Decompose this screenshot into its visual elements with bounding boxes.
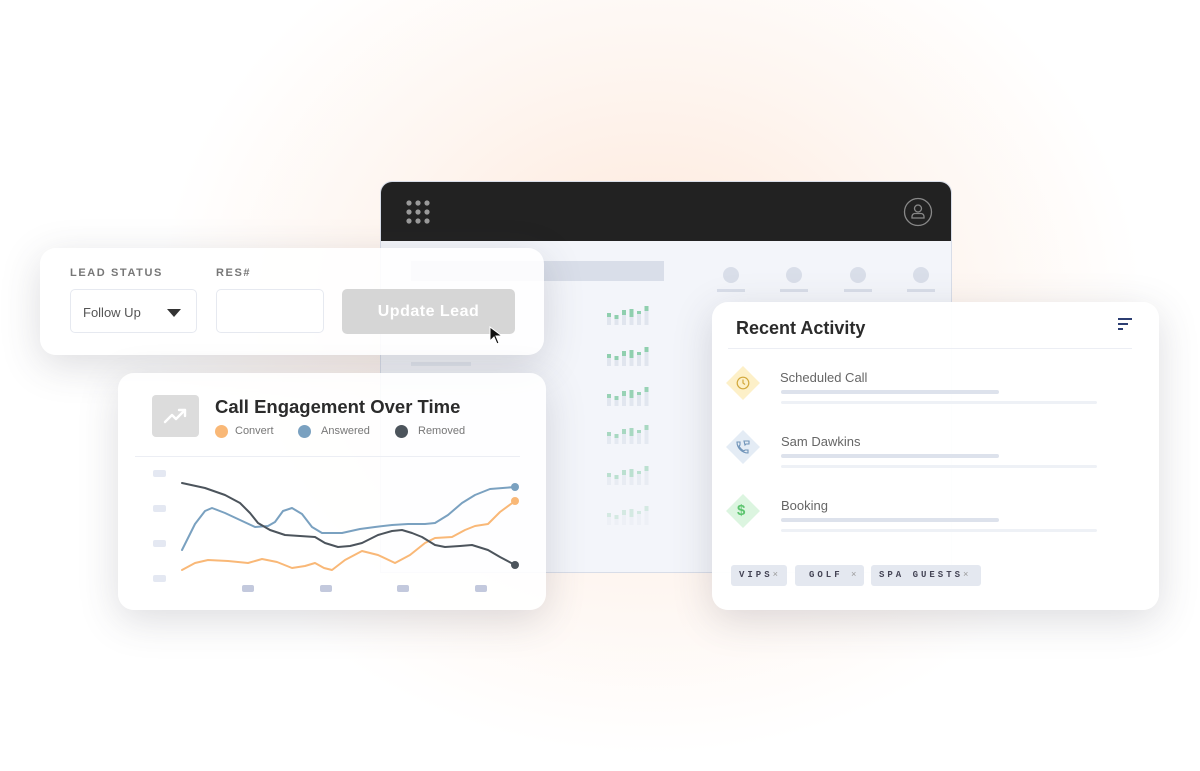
status circles bbox=[717, 267, 935, 292]
tag: spa guests: SPA GUESTS× bbox=[879, 570, 968, 580]
heading: Call Engagement Over Time bbox=[215, 396, 460, 417]
icon: cursor bbox=[490, 326, 500, 344]
panel: recent activity bbox=[712, 302, 1159, 610]
tag: golf: GOLF × bbox=[809, 570, 856, 580]
item: booking: Booking bbox=[781, 498, 828, 513]
tag: spa guests bbox=[871, 565, 981, 586]
tag: vips bbox=[731, 565, 787, 586]
icon: filter bbox=[1118, 318, 1132, 330]
label: lead status: LEAD STATUS bbox=[70, 267, 163, 279]
mini bar charts bbox=[607, 306, 648, 519]
tag: vips: VIPS× bbox=[739, 570, 778, 580]
dropdown bbox=[70, 289, 197, 333]
input box bbox=[216, 289, 324, 333]
item: scheduled call bbox=[726, 366, 1097, 404]
legend bbox=[215, 425, 465, 438]
item: sam dawkins: Sam Dawkins bbox=[781, 434, 860, 449]
legend: Convert bbox=[235, 425, 274, 437]
icon: user avatar bbox=[904, 198, 932, 226]
panel: dashboard window bbox=[380, 181, 952, 573]
panel: lead status form bbox=[40, 248, 544, 355]
item: scheduled call: Scheduled Call bbox=[780, 370, 867, 385]
button: update lead bbox=[342, 289, 515, 334]
legend: Removed bbox=[418, 425, 465, 437]
icon: grid dots bbox=[406, 200, 430, 224]
label: res#: RES# bbox=[216, 267, 251, 279]
line chart bbox=[153, 470, 519, 592]
panel: call engagement chart bbox=[118, 373, 546, 610]
item: sam dawkins bbox=[726, 430, 1097, 468]
button: update lead: Update Lead bbox=[378, 303, 479, 320]
item: booking: $ bbox=[737, 502, 745, 519]
legend: Answered bbox=[321, 425, 370, 437]
heading: Recent Activity bbox=[736, 318, 865, 338]
faint list lines bbox=[411, 362, 471, 366]
gray bar bbox=[411, 261, 664, 281]
header bar bbox=[381, 182, 953, 241]
dropdown: Follow Up bbox=[83, 305, 141, 320]
icon: trend bbox=[152, 395, 199, 437]
tag: golf bbox=[795, 565, 864, 586]
item: booking bbox=[726, 494, 1097, 532]
